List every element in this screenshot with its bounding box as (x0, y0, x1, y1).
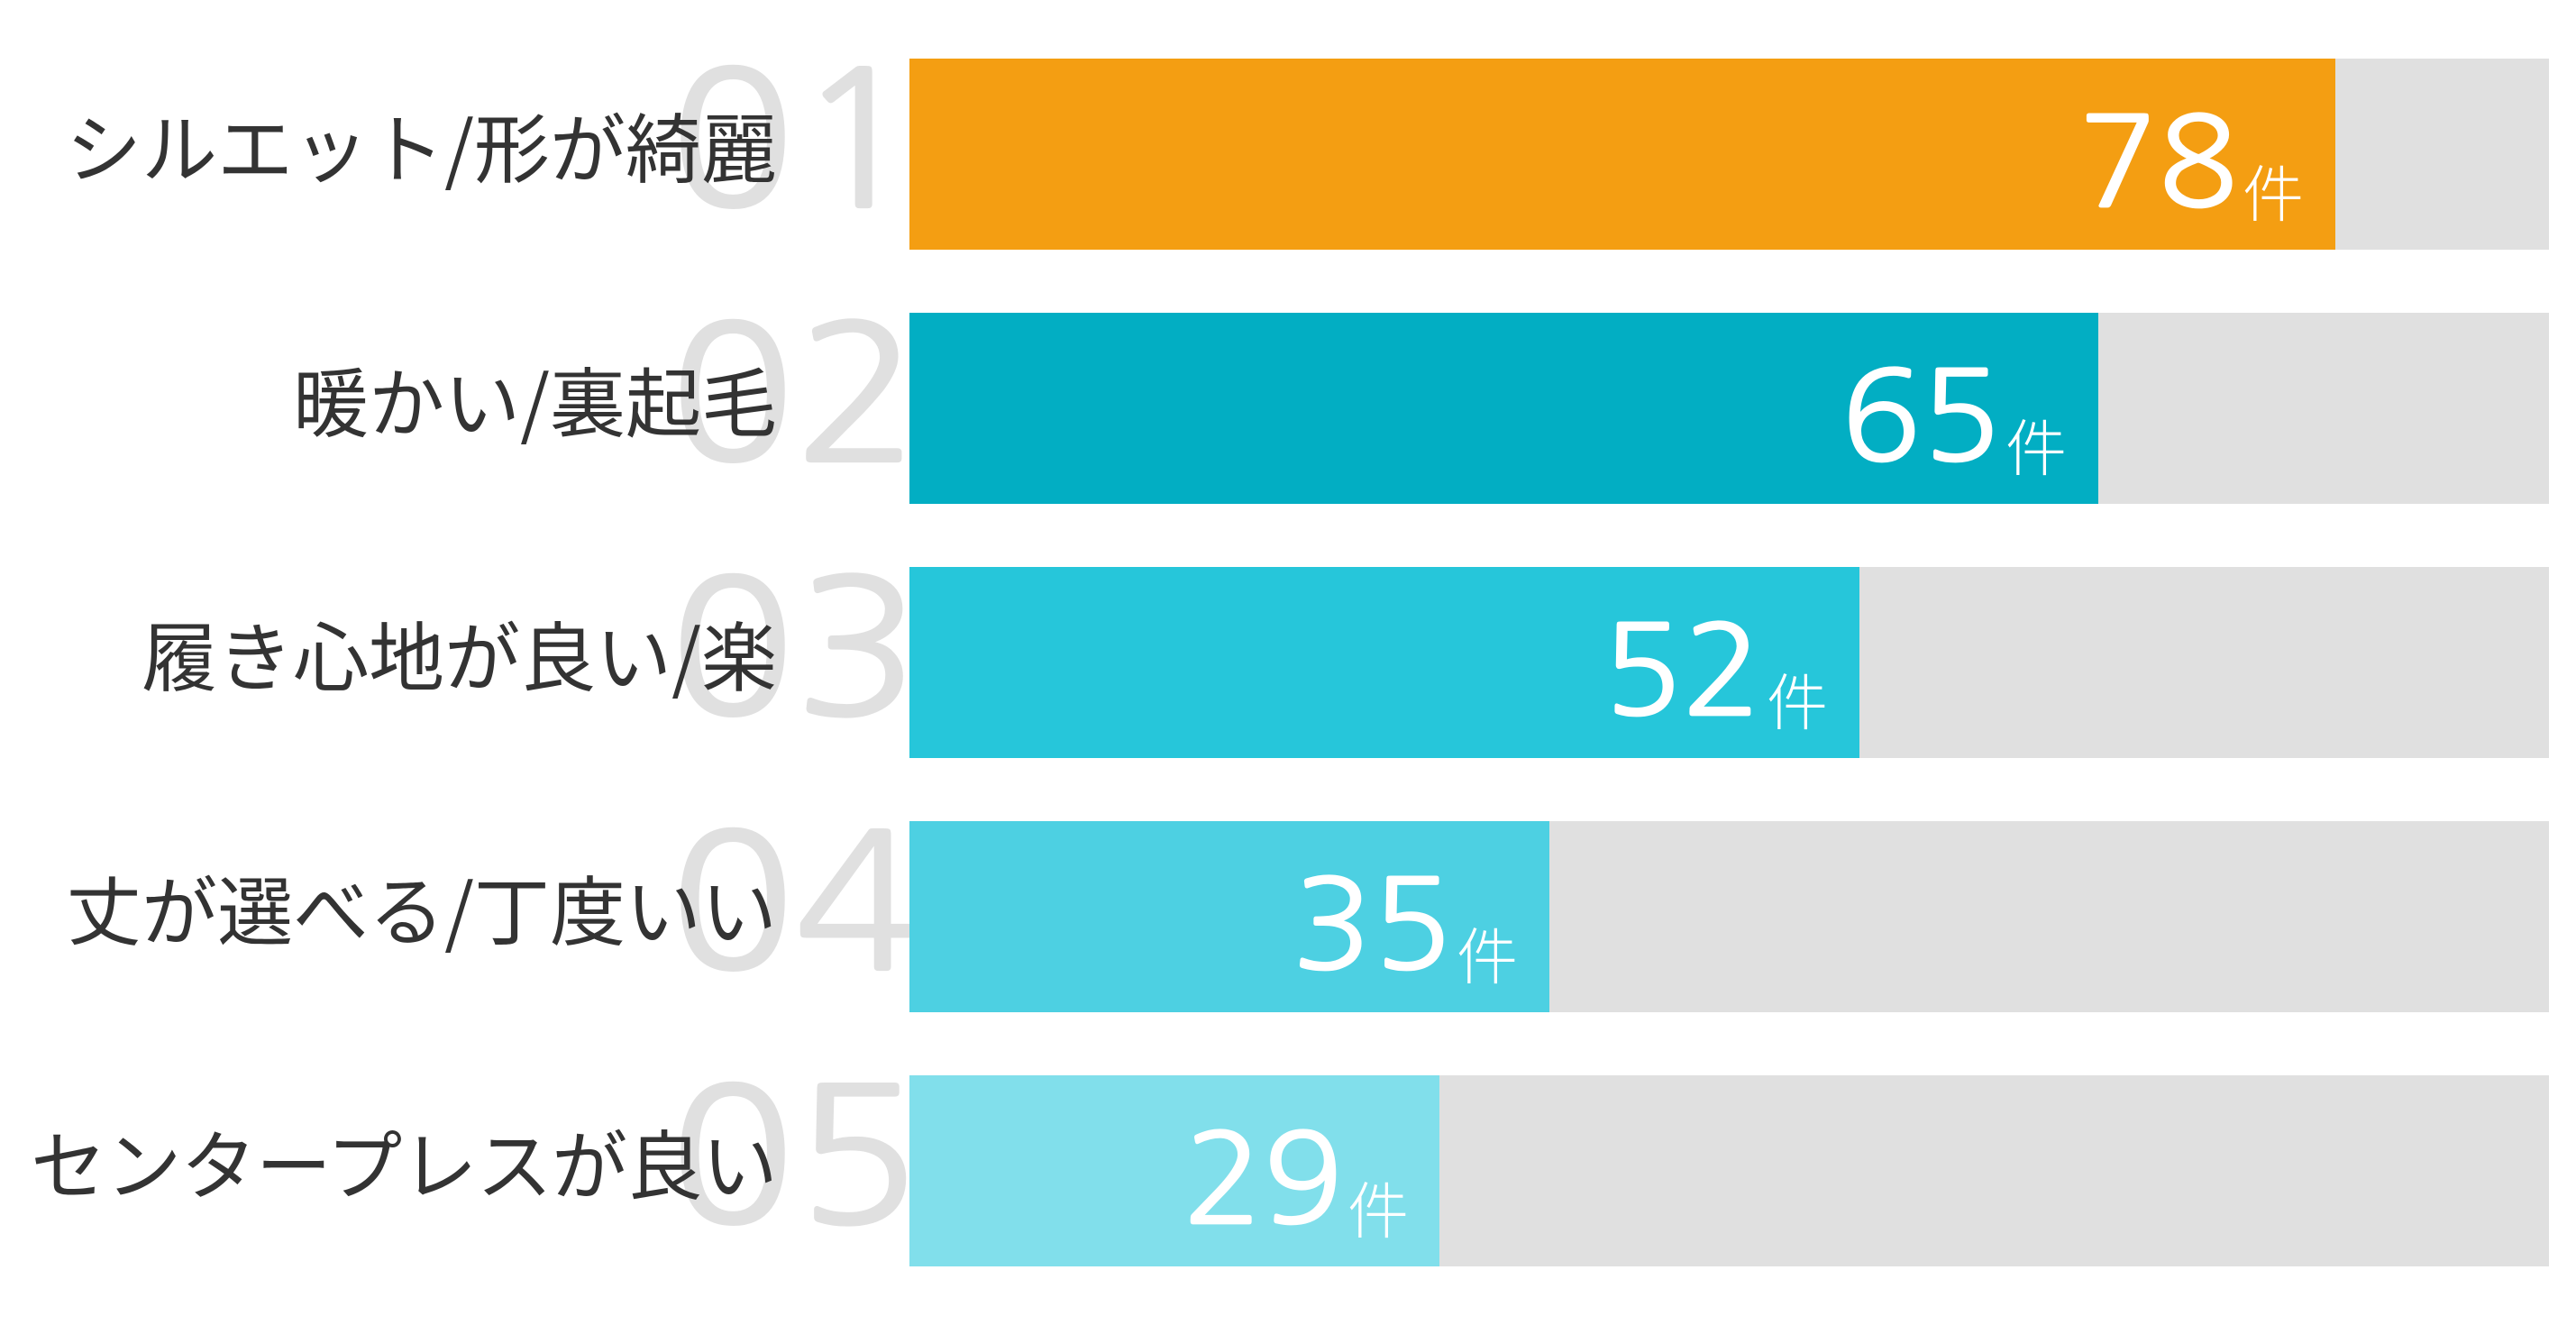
rank number 04: 04 (670, 809, 919, 996)
bar fill 2 (909, 313, 2098, 504)
value 52: 52 (1603, 609, 1762, 733)
unit 2: 件 (2005, 399, 2067, 489)
value 78: 78 (2078, 101, 2238, 224)
label 3: 履き心地が良い/楽 (142, 599, 777, 708)
bar fill 3 (909, 567, 1859, 758)
label 1: シルエット/形が綺麗 (66, 90, 777, 199)
value 35: 35 (1293, 864, 1452, 987)
bar track 2 (909, 313, 2549, 504)
row 3: 履き心地が良い/楽 52件 (142, 555, 2549, 758)
rank number 01: 01 (670, 47, 919, 233)
bar fill 5 (909, 1075, 1439, 1266)
value 29: 29 (1183, 1118, 1343, 1241)
bar track 5 (909, 1075, 2549, 1266)
label 4: 丈が選べる/丁度いい (66, 853, 777, 962)
bar track 1 (909, 59, 2549, 250)
unit 1: 件 (2243, 145, 2304, 234)
value 65: 65 (1841, 355, 2001, 479)
row 4: 丈が選べる/丁度いい 35件 (66, 809, 2549, 1012)
bar fill 1 (909, 59, 2335, 250)
label 2: 暖かい/裏起毛 (293, 344, 777, 453)
label 5: センタープレスが良い (31, 1107, 777, 1216)
bar track 4 (909, 821, 2549, 1012)
rank number 05: 05 (670, 1064, 919, 1250)
row 1: シルエット/形が綺麗 78件 (66, 47, 2549, 250)
unit 3: 件 (1767, 653, 1828, 743)
unit 4: 件 (1457, 908, 1518, 997)
bar track 3 (909, 567, 2549, 758)
row 5: センタープレスが良い 29件 (31, 1064, 2549, 1266)
bar fill 4 (909, 821, 1549, 1012)
rank number 03: 03 (670, 555, 919, 742)
rank number 02: 02 (670, 301, 919, 488)
row 2: 暖かい/裏起毛 65件 (293, 301, 2549, 504)
unit 5: 件 (1347, 1162, 1409, 1251)
